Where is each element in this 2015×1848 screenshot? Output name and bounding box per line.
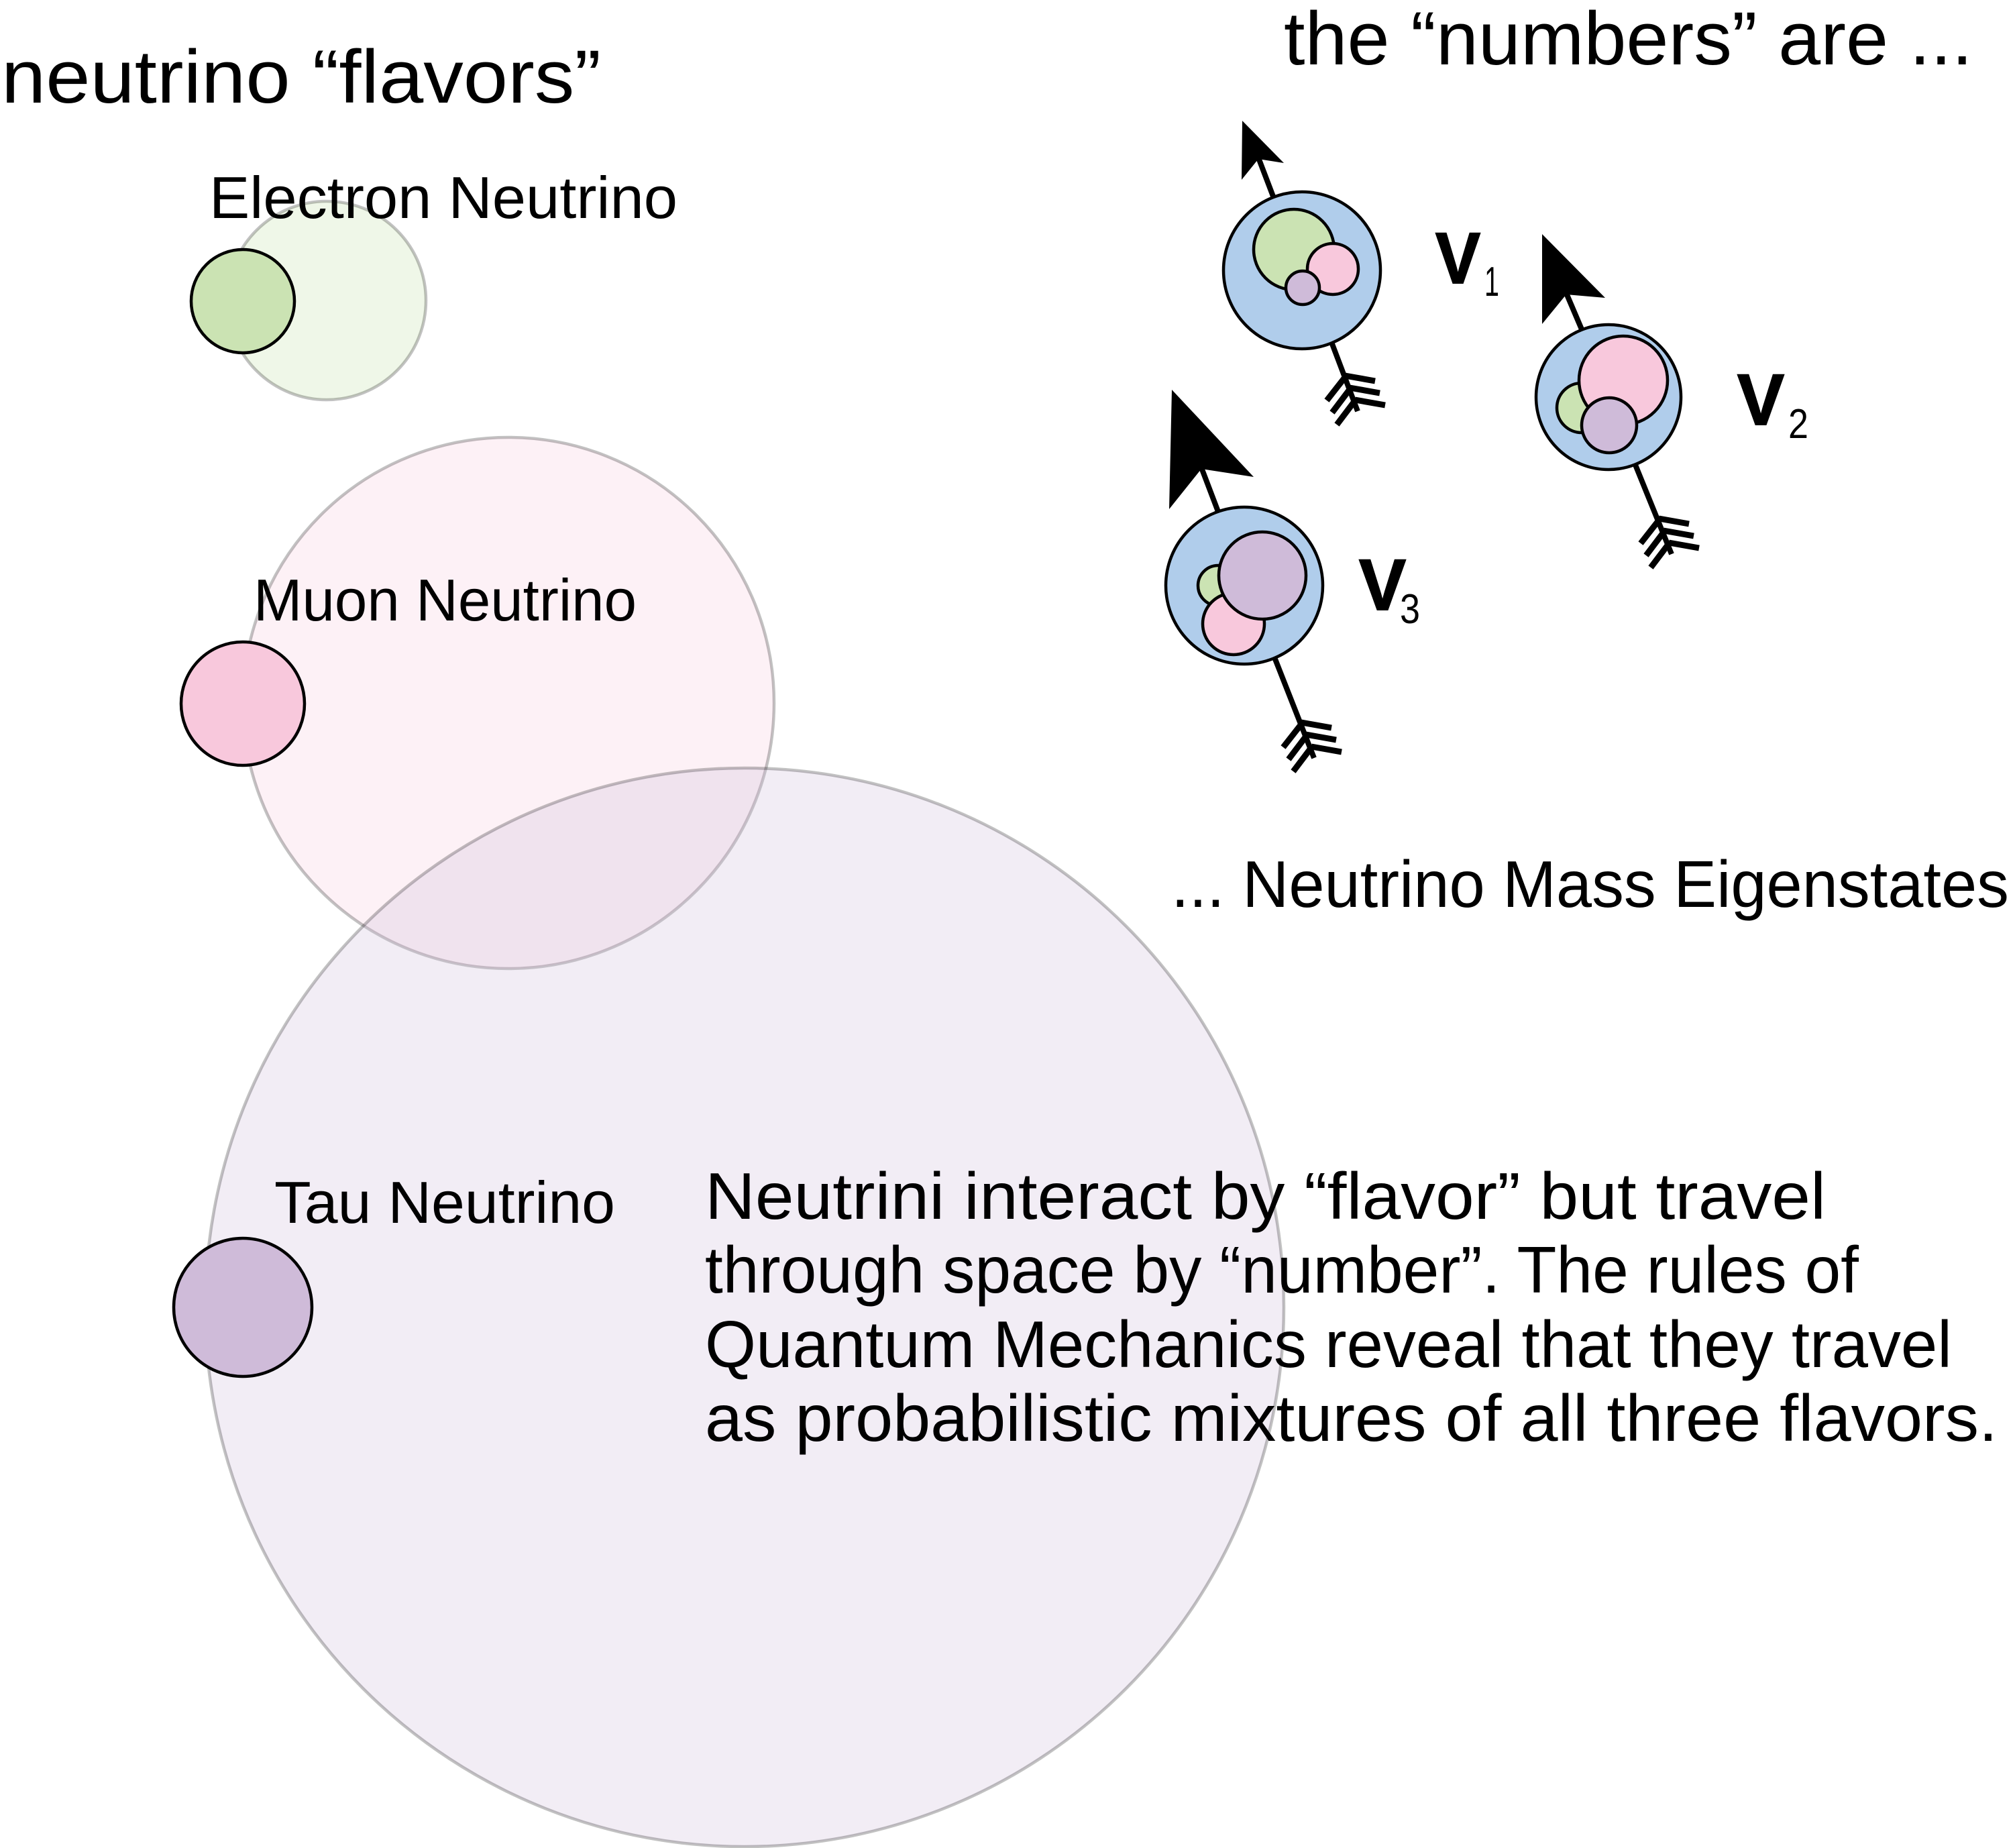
mass eigenstate: v3	[1166, 390, 1420, 771]
explanatory paragraph: Neutrini interact by “flavor” but travel	[705, 1159, 1826, 1233]
muon neutrino wave circle	[243, 437, 774, 969]
v1 pink component	[1307, 243, 1358, 294]
muon neutrino particle	[181, 642, 305, 765]
v3 outer sphere	[1166, 507, 1323, 664]
flavor: electron neutrino	[191, 164, 677, 400]
v3 green component	[1198, 565, 1238, 606]
title: neutrino flavors: neutrino “flavors”	[1, 35, 601, 119]
v2 pink component	[1579, 336, 1668, 425]
electron neutrino particle	[191, 250, 294, 353]
v1 green component	[1254, 209, 1334, 290]
v3 pink component	[1203, 593, 1264, 655]
label: v2: 2	[1788, 401, 1808, 447]
label: Tau Neutrino: Tau Neutrino	[274, 1169, 615, 1236]
explanatory paragraph: through space by “number”. The rules of	[705, 1233, 1859, 1307]
label: v3: 3	[1400, 586, 1420, 633]
flavor: muon neutrino	[181, 437, 774, 969]
v2 purple component	[1582, 398, 1637, 453]
label: v1: 1	[1484, 259, 1499, 305]
label: Muon Neutrino: Muon Neutrino	[254, 567, 637, 633]
v2 outer sphere	[1536, 325, 1681, 470]
mass eigenstate: v1	[1223, 121, 1499, 425]
flavor: tau neutrino	[174, 768, 1284, 1847]
v2 green component	[1557, 383, 1606, 433]
mass eigenstate: v2	[1536, 234, 1808, 567]
v1 purple component	[1286, 271, 1319, 305]
label: Electron Neutrino: Electron Neutrino	[209, 164, 677, 231]
v1 outer sphere	[1223, 192, 1380, 349]
explanatory paragraph	[705, 1159, 1998, 1455]
v3 purple component	[1219, 532, 1306, 619]
arrow: v1 spin	[1242, 121, 1385, 425]
label: v2: V	[1737, 359, 1784, 440]
arrow: v2 spin	[1542, 234, 1699, 567]
explanatory paragraph: as probabilistic mixtures of all three flavors.	[705, 1381, 1998, 1455]
label: v1: V	[1435, 217, 1480, 298]
electron neutrino wave circle	[227, 201, 426, 400]
tau neutrino wave circle	[205, 768, 1284, 1847]
caption: neutrino mass eigenstates: ... Neutrino Mass Eigenstates	[1171, 847, 2009, 921]
label: v3: V	[1359, 544, 1406, 625]
tau neutrino particle	[174, 1238, 312, 1376]
arrow: v3 spin	[1169, 390, 1342, 771]
label: v2	[1737, 359, 1808, 447]
explanatory paragraph: Quantum Mechanics reveal that they travel	[705, 1307, 1952, 1381]
